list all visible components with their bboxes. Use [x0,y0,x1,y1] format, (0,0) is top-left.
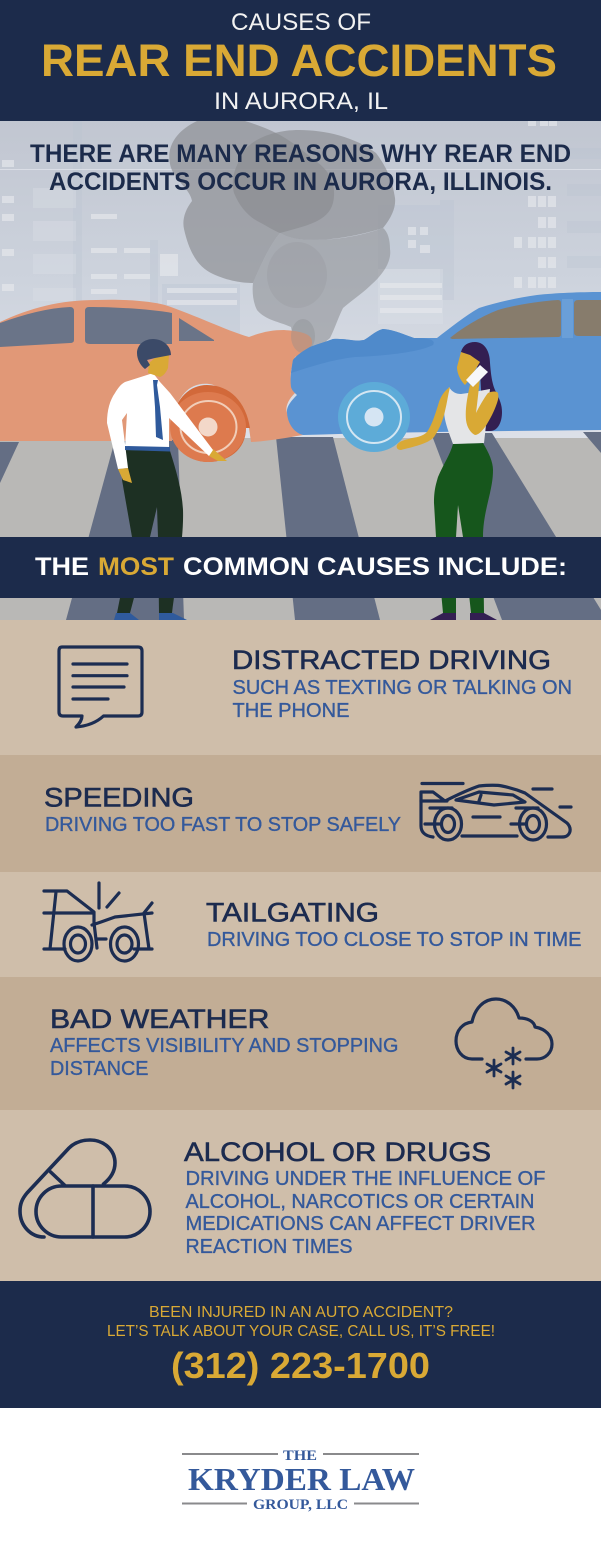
blue wheel [338,382,410,452]
description: alcohol or drugs [186,1168,546,1258]
banner: the most common causes [0,537,601,598]
road with crosswalk [0,432,601,620]
description: alcohol or drugs: DRIVING UNDER THE INFLUENCE OF [186,1168,546,1190]
heading: speeding: SPEEDING [44,782,194,812]
logo: the kryder law group: THE [283,1448,317,1464]
logo: the kryder law group [0,1408,601,1561]
subtitle: IN AURORA, IL [214,88,388,115]
woman figure [397,342,502,620]
man's head [137,339,171,377]
icon: collision [44,883,152,961]
call to action text: LET’S TALK ABOUT YOUR CASE, CALL US, IT’S FREE! [107,1323,495,1340]
banner: the most common causes: MOST [98,553,174,581]
phone number: (312) 223-1700 [171,1345,430,1386]
logo: the kryder law group: KRYDER LAW [188,1461,415,1497]
description: distracted driving: THE PHONE [232,700,350,722]
intro text: THERE ARE MANY REASONS WHY REAR END [30,140,571,168]
man's hands [118,449,227,483]
description: bad weather: DISTANCE [50,1058,148,1080]
woman's right arm [466,377,498,435]
man figure [107,339,227,620]
man's belt [125,446,170,452]
heading: bad weather: BAD WEATHER [50,1004,270,1034]
man's shoes [114,613,187,620]
woman's phone [466,365,488,387]
description: alcohol or drugs: REACTION TIMES [186,1236,352,1258]
description: alcohol or drugs: ALCOHOL, NARCOTICS OR CERTAIN [186,1191,534,1213]
panel: speeding [0,755,601,872]
description: distracted driving: SUCH AS TEXTING OR TALKING ON [232,677,572,699]
blue car windows [450,300,601,339]
header band [0,0,601,121]
logo: the kryder law group: GROUP, LLC [253,1497,348,1513]
woman's top [444,387,490,444]
heading: distracted driving: DISTRACTED DRIVING [232,645,551,675]
banner: the most common causes: THE [35,553,89,581]
panel: distracted driving [0,620,601,755]
description: distracted driving [232,677,572,722]
orange car [0,300,312,462]
panel: tailgating [0,872,601,977]
intro text: ACCIDENTS OCCUR IN AURORA, ILLINOIS. [49,168,552,196]
call to action text [107,1304,495,1340]
banner: the most common causes: COMMON CAUSES INCLUDE: [183,553,567,581]
woman's left arm [397,387,450,450]
description: bad weather [50,1035,398,1080]
icon: speeding car [421,784,571,840]
man's shirt [107,373,213,469]
orange car windows [0,307,214,347]
woman's hair [461,342,502,431]
city skyline background [0,121,601,441]
icon: snow cloud [456,999,552,1088]
intro text [30,140,571,196]
title: REAR END ACCIDENTS [41,35,557,86]
description: tailgating: DRIVING TOO CLOSE TO STOP IN TIME [207,929,582,951]
description: bad weather: AFFECTS VISIBILITY AND STOPPING [50,1035,398,1057]
description: alcohol or drugs: MEDICATIONS CAN AFFECT DRIVER [186,1213,536,1235]
description: speeding: DRIVING TOO FAST TO STOP SAFELY [45,814,401,836]
heading: alcohol or drugs: ALCOHOL OR DRUGS [184,1137,491,1167]
header line: causes of: CAUSES OF [231,9,371,36]
woman's face [457,352,480,385]
icon: speech bubble [59,647,142,727]
panel: bad weather [0,977,601,1110]
smoke [169,121,395,352]
footer call to action [0,1281,601,1408]
man's trousers [117,450,183,613]
blue car [287,292,601,452]
panel: alcohol or drugs [0,1110,601,1281]
icon: pills [20,1140,150,1237]
woman's shoes [430,613,497,620]
call to action text: BEEN INJURED IN AN AUTO ACCIDENT? [149,1304,453,1321]
heading: tailgating: TAILGATING [206,898,379,928]
illustration: crash scene [0,121,601,620]
orange wheel [170,385,250,462]
man's tie [153,380,163,440]
smoke over hood [291,319,315,353]
woman's trousers [434,443,493,613]
